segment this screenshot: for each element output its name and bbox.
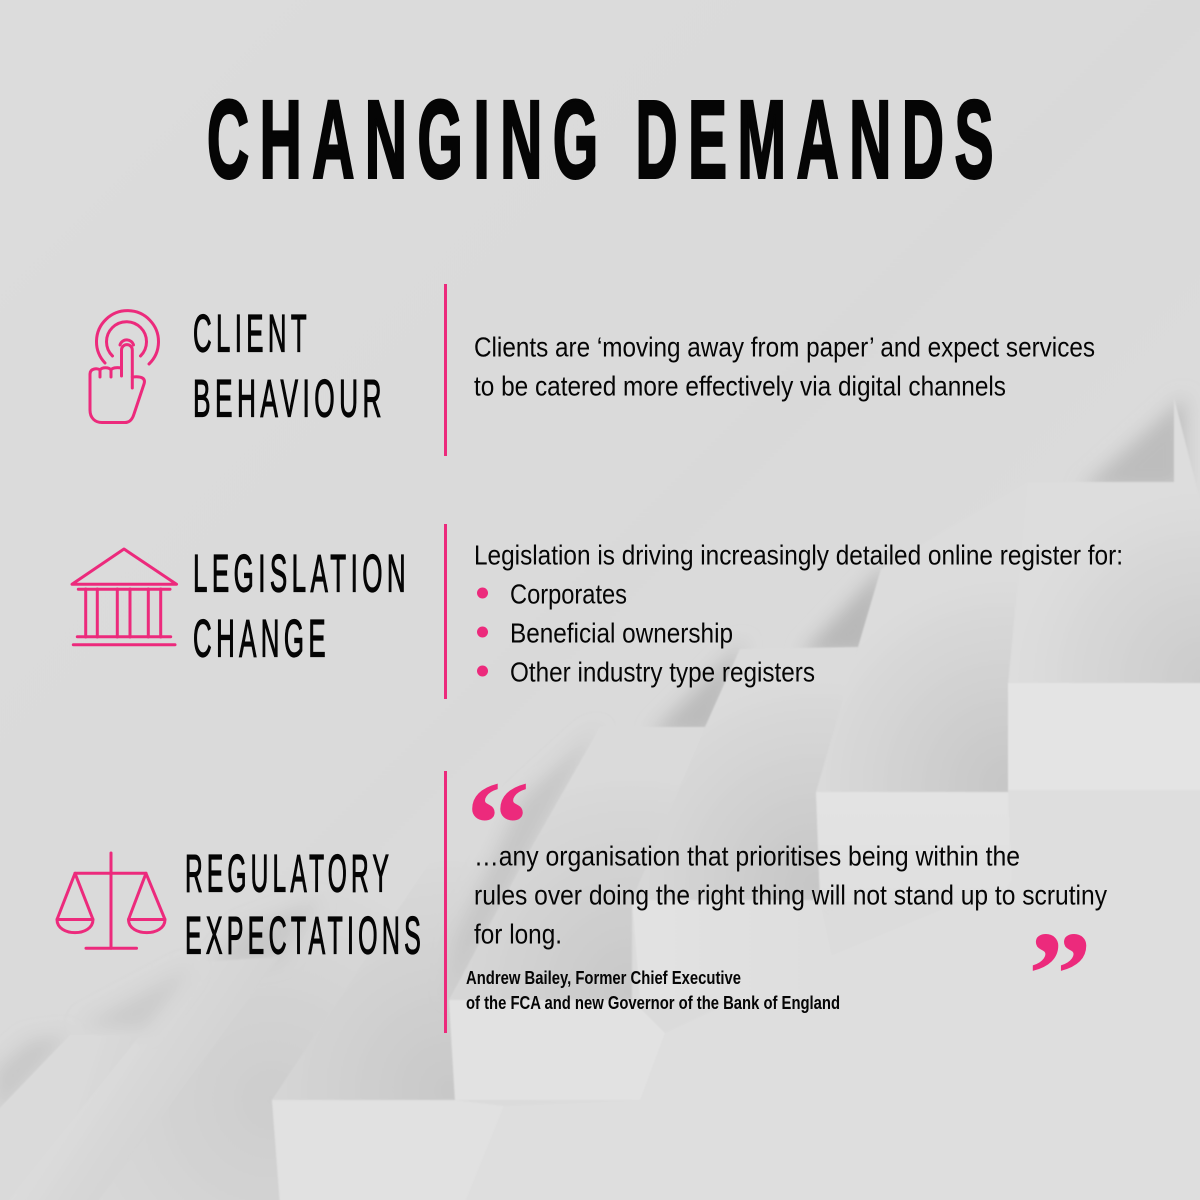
quote attribution: of the FCA and new Governor of the Bank of England — [466, 993, 840, 1013]
text: client behaviour description: to be catered more effectively via digital channels — [474, 370, 1006, 402]
icon: classical building — [72, 549, 176, 645]
quote attribution: Andrew Bailey, Former Chief Executive — [466, 968, 741, 988]
divider: legislation change — [444, 524, 447, 699]
text: EXPECTATIONS — [185, 906, 425, 966]
bullet list — [477, 578, 815, 688]
row: legislation change: CHANGE — [193, 610, 330, 668]
row: client behaviour: CLIENT — [193, 304, 311, 364]
text: LEGISLATION — [193, 544, 410, 604]
bullet list: Beneficial ownership — [510, 618, 733, 648]
row: regulatory expectations — [57, 844, 425, 966]
quote text: rules over doing the right thing will not stand up to scrutiny — [474, 880, 1107, 910]
quote text: …any organisation that prioritises being within the — [474, 840, 1020, 872]
icon: balance scales — [57, 853, 165, 948]
text: client behaviour description: Clients are ‘moving away from paper’ and expect services — [474, 332, 1095, 362]
text: BEHAVIOUR — [193, 370, 386, 428]
row: client behaviour — [90, 304, 386, 428]
icon: hand tapping — [90, 311, 158, 422]
quote attribution — [466, 968, 840, 1013]
text: client behaviour description — [474, 332, 1095, 402]
row: legislation change — [72, 544, 410, 668]
quote text: for long. — [474, 918, 562, 950]
quote text — [474, 840, 1107, 950]
text: legislation description: Legislation is driving increasingly detailed online register for: — [474, 540, 1123, 570]
divider: regulatory expectations — [444, 771, 447, 1033]
icon: opening quotation mark: “ — [466, 757, 530, 892]
bullet list: Corporates — [510, 578, 627, 610]
divider: client behaviour — [444, 284, 447, 456]
icon: closing quotation mark: ” — [1028, 907, 1092, 1042]
row: regulatory expectations: REGULATORY — [185, 844, 393, 904]
bullet list: Other industry type registers — [510, 656, 815, 688]
